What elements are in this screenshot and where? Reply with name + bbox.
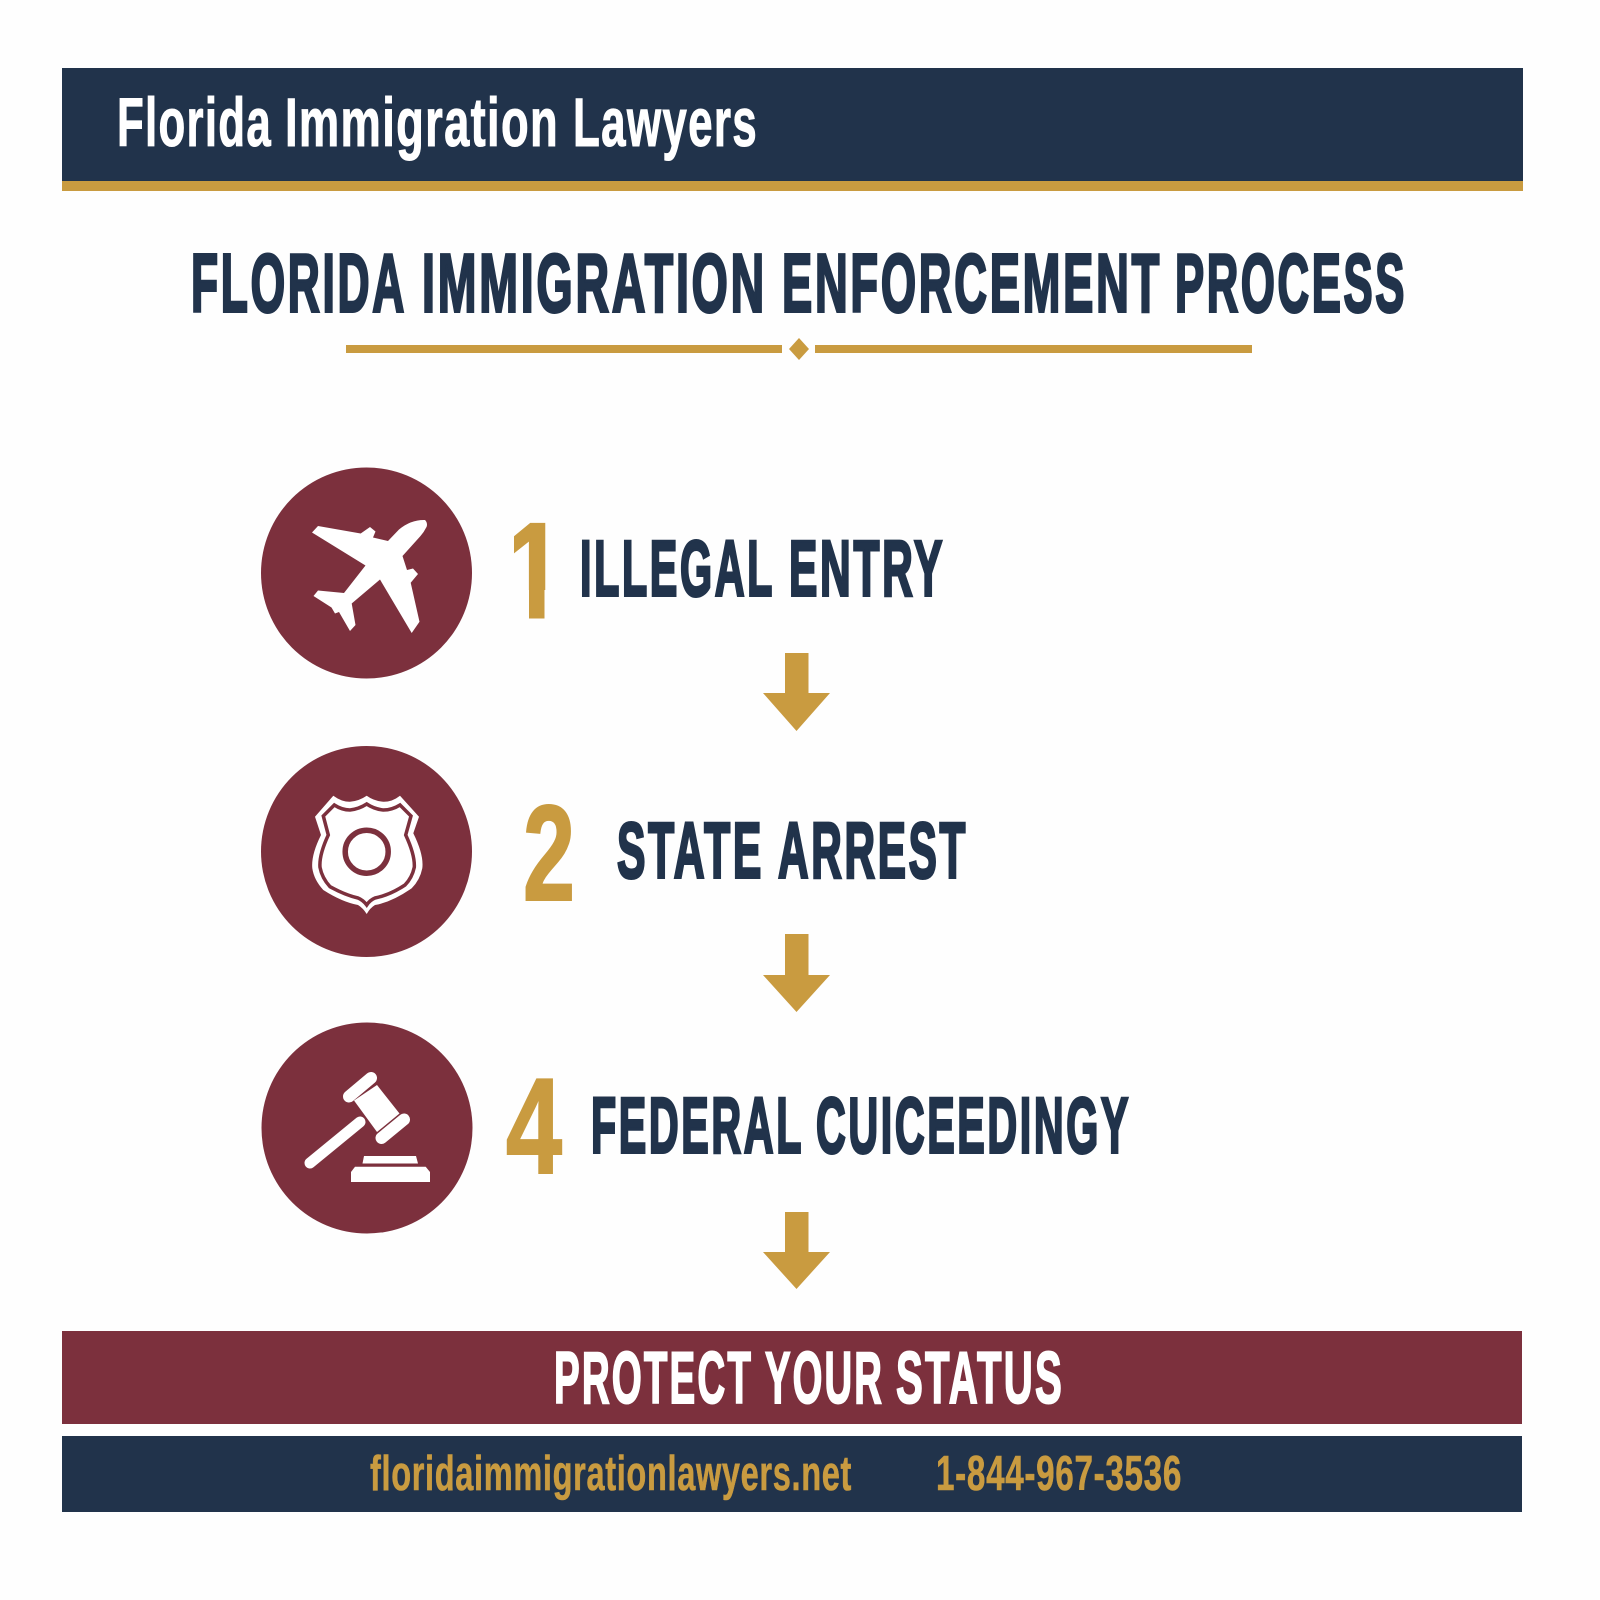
icon: police shield in circle	[261, 746, 472, 957]
icon: gavel in circle	[262, 1022, 472, 1234]
title: ENFORCEMENT	[782, 236, 1162, 330]
title	[191, 236, 1407, 330]
title divider with diamond	[346, 338, 1252, 360]
arrow 2	[763, 934, 830, 1012]
website address: floridaimmigrationlawyers.net	[370, 1447, 852, 1501]
step number 1: 1	[504, 494, 564, 646]
step label: illegal entry: ENTRY	[789, 524, 945, 612]
call to action text: YOUR	[765, 1338, 884, 1419]
step 1: illegal entry	[261, 468, 945, 678]
title: IMMIGRATION	[422, 236, 767, 330]
step 2: state arrest	[261, 746, 968, 957]
step number 4: 4	[506, 1050, 562, 1202]
arrow 1	[763, 653, 830, 731]
header firm name: Immigration	[285, 84, 559, 161]
icon: airplane in circle	[261, 468, 472, 678]
step label: federal cuiceedingy: FEDERAL	[591, 1080, 804, 1170]
header firm name	[117, 84, 758, 161]
step label: illegal entry: ILLEGAL	[580, 524, 775, 612]
call to action banner	[62, 1331, 1522, 1424]
step 3: federal proceeding	[262, 1022, 1131, 1234]
step label: state arrest: STATE	[617, 806, 764, 894]
title: FLORIDA	[191, 236, 407, 330]
step number 2: 2	[523, 777, 575, 929]
call to action text: PROTECT	[554, 1338, 753, 1419]
contact footer bar	[62, 1436, 1522, 1512]
call to action text: STATUS	[896, 1338, 1064, 1419]
header firm name: Lawyers	[573, 84, 758, 161]
header firm name: Florida	[117, 84, 272, 161]
phone number: 1-844-967-3536	[936, 1447, 1182, 1501]
step label: state arrest: ARREST	[778, 806, 968, 894]
step label: federal cuiceedingy: CUICEEDINGY	[816, 1080, 1131, 1170]
arrow 3	[763, 1212, 830, 1289]
header banner	[62, 68, 1523, 191]
